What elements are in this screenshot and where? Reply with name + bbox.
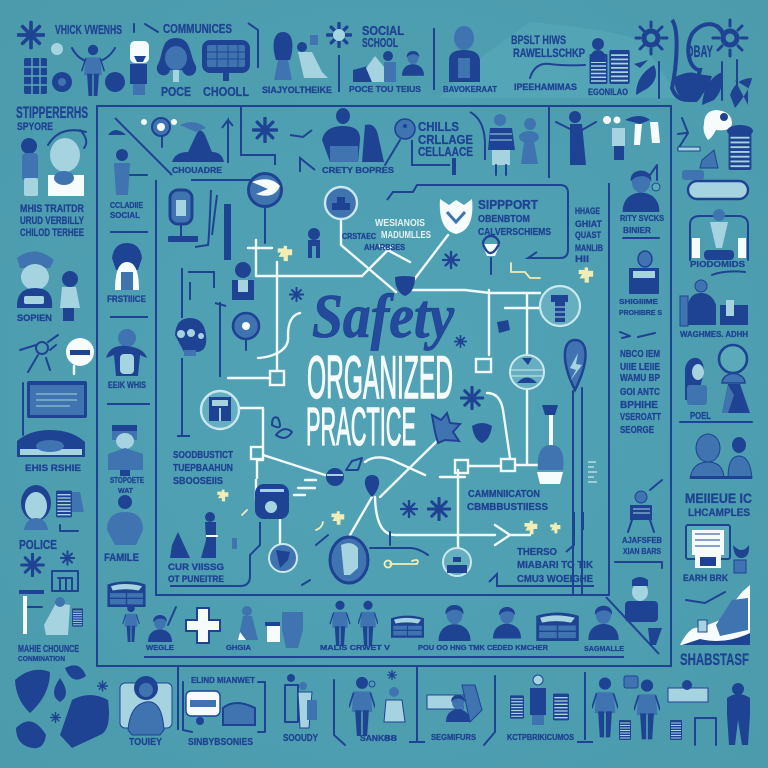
icon: right flower [105, 72, 125, 92]
text: navy labels: CRSTAEC [342, 232, 376, 241]
figure: pale face [48, 130, 86, 196]
frames and connector lines [97, 23, 671, 742]
heading: support: SIPPPORT [478, 198, 538, 212]
right column [678, 110, 753, 669]
text block [575, 206, 603, 265]
figure: seated bearded person [172, 122, 224, 162]
icons: leaves [15, 665, 109, 748]
caption: BAVOKERAAT [443, 84, 498, 94]
icon: tower microphone [168, 190, 198, 242]
icon: star [253, 118, 277, 142]
caption: MALIS CRWET V [320, 643, 390, 652]
icon: anvil [648, 628, 662, 645]
caption: OT PUNEITRE [168, 574, 224, 584]
heading: support [478, 198, 551, 238]
icon: notice board [686, 525, 730, 568]
figures: group at shelf [680, 280, 748, 326]
text: navy labels [342, 232, 406, 252]
figure: person with tripod [170, 512, 237, 558]
figure: person arms raised [72, 45, 115, 96]
heading: chills college: CELLAACE [418, 145, 473, 159]
heading: chills college: CHILLS [418, 120, 459, 134]
text block: BPHIHE [620, 400, 658, 411]
text block: CHILOD TERHEE [20, 227, 84, 239]
node: tray circle [443, 548, 471, 576]
figure: machine and box [265, 612, 303, 648]
heading: social school [362, 23, 404, 50]
figures: embrace group [322, 108, 384, 162]
icon: desk [668, 680, 716, 745]
top landscape band [440, 22, 680, 98]
figure: white faced person [130, 41, 149, 95]
vertical label bar [224, 204, 231, 260]
text: white labels: MADUMLLES [381, 230, 431, 241]
icon: white shield [440, 199, 472, 234]
caption [110, 476, 145, 495]
caption [110, 200, 143, 220]
text: sood block [173, 450, 233, 487]
figure: officer [108, 425, 143, 476]
figure: bearded bust [625, 577, 658, 622]
caption: MAHIE CHOUNCE [18, 644, 79, 655]
bottom row [15, 665, 750, 748]
caption: FRSTIIICE [107, 294, 146, 304]
icon: heart knot [395, 276, 415, 296]
text: communication: CAMMNIICATON [468, 489, 540, 500]
wave [712, 271, 745, 275]
icon: van [186, 691, 220, 725]
icon: small loop [272, 417, 292, 438]
navy stars [290, 252, 483, 520]
caption [622, 536, 662, 556]
figure: bust in frame [690, 209, 748, 260]
text block: HHAGE [575, 206, 600, 217]
icon: maple leaf [432, 413, 460, 443]
heading: social school: SCHOOL [362, 35, 398, 50]
caption: SEGMIFURS [431, 732, 476, 742]
heading: meiieue: MEIIEUE IC [685, 490, 752, 506]
icon: blue balloon [565, 340, 586, 595]
icon: bird circle [248, 174, 282, 243]
icon: heart [472, 423, 492, 443]
icon: monitor [202, 40, 250, 81]
title: safety: Safety [312, 283, 454, 351]
arrows [620, 332, 655, 338]
caption: WEGLE [146, 643, 174, 652]
top panel inside frame [141, 108, 660, 175]
label: police: POLICE [19, 537, 57, 552]
caption: SAGMALLE [584, 644, 624, 653]
icon: buildings with person [590, 38, 630, 84]
figure: woman with book [685, 358, 707, 405]
label: sopien: SOPIEN [17, 313, 52, 324]
caption: 88 [384, 733, 397, 743]
icon: top right suns and tree: OBAY [686, 42, 713, 61]
icon: vase [733, 545, 749, 573]
inner right column [615, 165, 664, 645]
text block: MANLIB [575, 243, 603, 254]
label: touiey: TOUIEY [129, 736, 162, 748]
icon: top right suns and tree [634, 20, 752, 108]
white box nodes [251, 359, 515, 473]
caption: BINIER [623, 225, 651, 235]
bracket panel [183, 675, 265, 748]
text block [20, 203, 84, 239]
caption: GHGIA [226, 643, 252, 652]
caption: POU OO HNG TMK CEDED KMCHER [418, 643, 549, 652]
node: book circle [201, 391, 239, 429]
text: therso: MIABARI TO TIK [517, 559, 593, 571]
heading: communices: COMMUNICES [163, 21, 232, 36]
node: knot and triangle [326, 458, 362, 486]
text block: GHIAT [575, 219, 602, 230]
node: navy balloon [365, 475, 379, 497]
heading: meiieue: LHCAMPLES [688, 507, 750, 519]
heading: meiieue [685, 490, 752, 519]
heading: vhick vwenhs: VHICK VWENHS [55, 22, 122, 37]
icon: stacked cylinder [727, 125, 753, 170]
label: poel: POEL [690, 411, 711, 422]
heading: chills college: CRLLAGE [418, 133, 473, 147]
figure: face [21, 485, 51, 530]
light tick marks [588, 462, 597, 482]
figure: bust [493, 607, 521, 638]
icon: books [107, 581, 146, 607]
caption: CUR VIISSG [168, 562, 224, 572]
navy branch [302, 532, 428, 585]
heading: ELIND MIANWET [191, 675, 256, 685]
figures: social group [353, 51, 424, 82]
figure: robed person [238, 606, 258, 640]
text: sood block: TUEPBAAHUN [173, 463, 233, 474]
figure: bust with raised arm [148, 607, 176, 642]
figure: person with coat [285, 674, 317, 728]
icon: star burst [18, 22, 44, 48]
text: bpslt hiws [511, 33, 585, 93]
heading: stipperehs spyore: STIPPERERHS [16, 103, 88, 122]
icon: bag [223, 703, 255, 725]
label: soody: SOOUDY [283, 732, 318, 744]
icon: left flower [52, 72, 72, 92]
label: chooll: CHOOLL [203, 84, 249, 99]
node: camera box [255, 480, 316, 519]
figures: kids [384, 670, 405, 722]
figure: second person [603, 116, 625, 160]
text: communication: CBMBBUSTIIESS [467, 502, 548, 513]
text: white labels: WESIANOIS [375, 218, 425, 229]
text block: MHIS TRAITDR [20, 203, 84, 215]
icon: machine [624, 676, 638, 688]
figure: person with jars [510, 675, 569, 725]
icon: tee [452, 158, 456, 175]
caption: SOCIAL [110, 210, 140, 220]
caption: XIAN BARS [623, 547, 662, 556]
icon: lamp and pot [537, 405, 564, 484]
text block: UIIE LEIIE [620, 362, 660, 373]
icon: monitor [27, 381, 87, 418]
target icon [233, 313, 259, 350]
icon: grid block [24, 58, 47, 94]
caption: WAGHMES. ADHH [680, 330, 748, 339]
node: top circle [325, 187, 357, 219]
text: communication [467, 489, 548, 513]
figures: pair [330, 601, 378, 646]
icon: striped bins [619, 720, 682, 740]
figure: bust [588, 606, 619, 640]
caption: PIODOMIDS [690, 260, 746, 269]
text block: NBCO IEM [620, 349, 660, 360]
figure: dark silhouette [727, 683, 750, 745]
small navy figure [232, 262, 254, 300]
figure: bust with horn [623, 165, 660, 212]
caption: SIAJYOLTHEIKE [262, 85, 332, 95]
text block [620, 349, 661, 436]
scene icon [536, 612, 579, 641]
icon: jellyfish [308, 228, 320, 258]
figure: portrait [120, 676, 172, 735]
caption: SANKS [360, 733, 390, 743]
caption: AJAFSFEB [622, 536, 662, 545]
figure: standing person with bag [449, 26, 480, 82]
center network: ORGANIZED [307, 344, 453, 411]
figure: woman and seated person [274, 32, 328, 80]
swoosh [258, 313, 300, 358]
icon: lamp [722, 374, 750, 413]
icon: slash [134, 24, 158, 32]
icon: bulb ring [141, 118, 177, 147]
figure: woman with dark hair [157, 38, 196, 82]
text: navy labels: AHARBSES [364, 243, 406, 252]
top row [18, 20, 752, 108]
heading: stipperehs spyore: SPYORE [17, 121, 53, 133]
figure: monitor and person [427, 685, 482, 722]
icon: skull [51, 43, 63, 55]
center network: PRACTICE [306, 397, 416, 457]
node: globe circle [269, 544, 297, 572]
text: therso [517, 546, 593, 585]
caption: STOPOETE [110, 476, 145, 485]
caption: EHIS RSHIE [25, 463, 81, 474]
icon: pinwheel [327, 23, 351, 47]
icon: white cross [185, 607, 221, 644]
heading: stipperehs spyore [16, 103, 88, 133]
caption: RITY SVCKS [620, 213, 664, 223]
icons: flower and star [22, 551, 74, 576]
caption [18, 644, 79, 663]
icon: server [56, 491, 84, 531]
heading: chills college [418, 120, 473, 159]
icon: mountain [680, 585, 750, 645]
caption: CRETY BOPRES [322, 165, 394, 175]
caption: PROHIBRE S [619, 308, 662, 317]
center network [168, 174, 603, 595]
caption: WAT [118, 488, 134, 495]
heading: support: OBENBTOM [478, 213, 530, 225]
text block: SEORGE [620, 425, 654, 436]
yellow puzzle icons [217, 246, 593, 534]
label: poce: POCE [161, 84, 191, 99]
text: therso: THERSO [517, 546, 557, 558]
figure: seated reader [628, 480, 662, 532]
icon: white blob [704, 110, 732, 140]
caption: CHOUADRE [172, 165, 222, 175]
figures: man, person, objects [556, 111, 596, 165]
figure: child [519, 118, 539, 164]
figure: doctor [349, 677, 375, 736]
node: portrait oval [330, 537, 368, 583]
figure: mother [107, 495, 143, 545]
figure: bust [438, 605, 470, 641]
left column [16, 103, 94, 663]
text: bpslt hiws: BPSLT HIWS [511, 33, 566, 47]
figure: small woman [60, 271, 80, 321]
figure: stocky person [106, 329, 147, 376]
text block: QUAST [575, 230, 601, 241]
caption: CONMINATION [18, 654, 65, 663]
caption [620, 213, 664, 235]
node: small tag [497, 320, 510, 333]
caption: CCLADIIE [110, 200, 143, 210]
icon: ring [719, 345, 747, 373]
caption: EEIK WHIS [108, 380, 146, 390]
figure: striped person [488, 114, 515, 175]
icon: bed [17, 430, 85, 457]
figure: person in cap [17, 251, 54, 308]
heading: social school: SOCIAL [362, 23, 404, 38]
caption: SHIGIIIME [619, 297, 658, 306]
icon: white balloon [66, 338, 94, 374]
text block: VSEROATT [620, 412, 661, 423]
text block: WAMU BP [620, 373, 660, 384]
text: white labels [375, 218, 431, 241]
icon: dome [108, 130, 126, 135]
text block: GOI ANTC [620, 387, 660, 398]
heading: support: CALVERSCHIEMS [478, 226, 551, 238]
text block: URUD VERBILLY [20, 215, 84, 227]
figures: two heads [690, 434, 752, 479]
caption: SINBYBSONIES [188, 737, 253, 748]
figure: white arch person [112, 243, 142, 290]
node: striped circle [540, 286, 580, 326]
caption: KCTPBRIKICUMOS [507, 733, 575, 742]
figure: tools and person [19, 590, 83, 635]
icon: gate [52, 571, 78, 591]
text: sood block: SBOOSEIIS [173, 476, 223, 487]
text: bpslt hiws: IPEEHAMIMAS [514, 82, 577, 93]
text: bpslt hiws: RAWELLSCHKP [513, 48, 585, 60]
figure: dark bust [629, 251, 659, 294]
text: sood block: SOODBUSTICT [173, 450, 233, 461]
icon: grill [482, 236, 500, 274]
second column [104, 130, 624, 653]
white connectors [228, 220, 545, 548]
icon: bed capsule [682, 170, 748, 199]
text: therso: CMU3 WOEIGHE [517, 573, 593, 585]
caption [168, 562, 224, 584]
icon: pulley [385, 119, 415, 165]
icon: bird [20, 335, 58, 372]
yellow connectors [242, 263, 540, 568]
label: family: FAMILE [104, 552, 139, 564]
figures: two men [592, 678, 660, 739]
figure: hanging coats [625, 116, 660, 145]
caption: EGONILAO [588, 87, 628, 97]
node: volcano circle [510, 355, 544, 389]
caption: EARH BRK [683, 573, 728, 584]
caption [619, 297, 662, 317]
caption: POCE TOU TEIUS [349, 84, 421, 94]
text block: HII [575, 254, 589, 265]
icon: three faced tree [175, 318, 206, 356]
icon: seat [700, 150, 718, 168]
figure: person with hat [21, 138, 38, 196]
figure: person [114, 149, 147, 195]
figure: walking person [123, 605, 139, 642]
scene icon [391, 616, 424, 638]
